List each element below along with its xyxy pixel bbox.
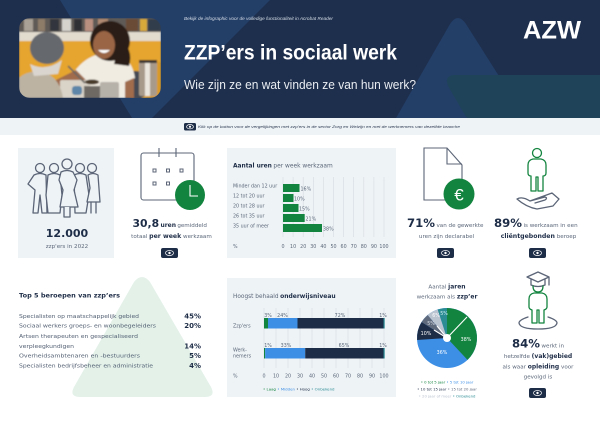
header photo	[19, 18, 161, 99]
stat: 84%	[503, 336, 574, 380]
row labels	[233, 324, 252, 360]
icon: document with euro: €	[454, 186, 464, 204]
pie	[417, 308, 477, 368]
bar values: 1%	[379, 313, 387, 319]
axis labels	[233, 374, 389, 380]
axis labels: 40	[320, 244, 326, 250]
bar values: 38%	[323, 226, 334, 232]
occupation percentages: 20%	[184, 322, 201, 330]
axis labels: 50	[330, 244, 337, 250]
legend: • Laag • Midden • Hoog • Onbekend	[263, 386, 335, 392]
panel: hours bar chart	[227, 148, 396, 258]
axis labels: 100	[379, 374, 389, 380]
bar values: 1%	[379, 343, 387, 349]
axis labels: 30	[297, 374, 303, 380]
bar labels: Minder dan 12 uur	[233, 184, 277, 190]
occupation rows: Specialisten bedrijfsbeheer en administratie	[19, 364, 154, 370]
photo: man	[19, 72, 63, 98]
panel: 12.000 zzp'ers	[18, 148, 114, 258]
chart title: Hoogst behaaldonderwijsniveau	[233, 293, 336, 300]
pie title: Aantal jaren	[428, 284, 466, 290]
stat: 89%: cliëntgebonden beroep	[501, 233, 577, 240]
icon: graduate person	[519, 272, 557, 329]
bar labels: 35 uur of meer	[233, 224, 269, 230]
axis labels: 90	[371, 244, 377, 250]
pie legend: • 10 tot 15 jaar • 15 tot 20 jaar	[417, 386, 477, 392]
row labels: Werk-	[233, 348, 247, 354]
pie title: werkzaam als zzp’er	[417, 294, 477, 300]
bar values: 21%	[306, 216, 317, 222]
stat: 84%: hetzelfde (vak)gebied	[504, 353, 572, 360]
icon: person on hand	[517, 148, 559, 209]
bar: werknemers	[264, 348, 385, 358]
icon: eye button	[529, 248, 546, 258]
stat: 84%: als waar opleiding voor	[503, 364, 574, 370]
bar labels: 20 tot 28 uur	[233, 204, 265, 210]
icon: eye button	[437, 248, 454, 258]
pie legend: • 0 tot 5 jaar • 5 tot 10 jaar	[421, 380, 474, 384]
bar values: 65%	[339, 343, 350, 349]
axis labels: 60	[341, 244, 347, 250]
stat: 12.000: 12.000	[46, 227, 89, 240]
axis labels: %	[233, 374, 238, 380]
occupation rows: Artsen therapeuten en gespecialiseerd	[19, 334, 138, 340]
axis labels: 60	[333, 374, 339, 380]
instruction band	[0, 118, 600, 135]
bar labels: 26 tot 35 uur	[233, 214, 265, 220]
pie: 6%	[432, 313, 440, 319]
axis labels: 0	[281, 244, 285, 250]
bar labels	[233, 184, 277, 230]
axis labels: 100	[379, 244, 389, 250]
icon: eye button	[529, 388, 546, 398]
axis labels: 80	[361, 244, 367, 250]
bars	[283, 184, 322, 232]
stat: 30,8 uren: totaal per week werkzaam	[131, 233, 212, 240]
pie: 10%	[421, 331, 432, 337]
chart title: Aantal uren per week werkzaam	[233, 164, 333, 170]
header banner	[0, 0, 600, 130]
stat: 30,8 uren	[131, 217, 212, 240]
row labels: nemers	[233, 354, 252, 360]
pie legend: • 20 jaar of meer • Onbekend	[419, 394, 476, 398]
stat: 89%: 89% is werkzaam in een	[494, 216, 578, 230]
occupation percentages: 14%	[184, 342, 201, 350]
icon: group of people	[28, 159, 100, 217]
occupation rows: verpleegkundigen	[19, 344, 74, 350]
pie title	[417, 284, 477, 300]
pie: 38%	[461, 337, 472, 343]
axis labels: %	[233, 244, 238, 250]
decorative triangle	[72, 277, 213, 397]
stat: 71%: 71% van de gewerkte	[407, 216, 484, 230]
bar values: 24%	[277, 313, 288, 319]
pie: 5%	[427, 321, 435, 327]
occupation rows: Specialisten op maatschappelijk gebied	[19, 314, 139, 320]
bar values: 72%	[335, 313, 346, 319]
title: ZZP’ers in sociaal werk	[184, 40, 397, 64]
pie: 5%	[440, 311, 448, 317]
stat: 84%: gevolgd is	[524, 374, 552, 380]
stat: 30,8 uren: 30,8urengemiddeld	[132, 217, 207, 230]
bar values	[294, 186, 334, 232]
photo: pot	[60, 80, 90, 98]
axis labels: 80	[357, 374, 363, 380]
axis labels: 20	[300, 244, 306, 250]
axis labels: 70	[351, 244, 357, 250]
bar values	[264, 313, 387, 349]
occupation rows: Sociaal werkers groeps- en woonbegeleiders	[19, 324, 156, 330]
bar: zzp'ers	[264, 318, 385, 328]
bar values: 16%	[300, 186, 312, 192]
subtitle: Wie zijn ze en wat vinden ze van hun werk?	[184, 77, 416, 92]
axis labels	[233, 244, 389, 250]
bar values: 10%	[294, 196, 305, 202]
occupation percentages: 5%	[189, 352, 201, 360]
axis labels: 90	[369, 374, 375, 380]
stat: 84%: 84% werkt in	[512, 336, 565, 350]
photo: woman	[74, 54, 135, 98]
axis labels: 50	[321, 374, 327, 380]
bar values: 3%	[264, 313, 272, 319]
bar values: 1%	[264, 343, 272, 349]
pie: 36%	[437, 350, 448, 356]
panel: education chart	[227, 278, 396, 397]
bar labels: 12 tot 20 uur	[233, 194, 265, 200]
pie legend	[417, 380, 477, 398]
icon: eye button	[161, 248, 178, 258]
instruction text: Klik op de button voor de vergelijkingen met zzp’ers in de sector Zorg en Welzijn en met de werknemers van dezelfde branche	[198, 124, 461, 129]
stat: 71%	[407, 216, 484, 240]
occupation percentages: 4%	[189, 362, 201, 370]
pie chart: years as zzp'er	[417, 284, 477, 398]
photo: urn	[139, 60, 157, 96]
icon: document with euro	[424, 148, 474, 210]
occupation percentages	[184, 312, 201, 370]
occupation rows: Overheidsambtenaren en -bestuurders	[19, 354, 140, 360]
axis labels: 40	[309, 374, 315, 380]
axis labels: 30	[310, 244, 316, 250]
bar values: 33%	[281, 343, 292, 349]
row labels: Zzp'ers	[233, 324, 251, 330]
logo: AZW	[523, 16, 581, 44]
caption: zzp'ers in 2022	[46, 244, 88, 250]
axis labels: 0	[262, 374, 266, 380]
axis labels: 70	[345, 374, 351, 380]
axis labels: 20	[285, 374, 291, 380]
stat: 71%: uren zijn declarabel	[419, 234, 475, 240]
bar values: 15%	[299, 206, 310, 212]
axis labels: 10	[290, 244, 296, 250]
acrobat note: Bekijk de infographic voor de volledige functionaliteit in Acrobat Reader	[184, 16, 334, 21]
occupation percentages: 45%	[184, 312, 201, 320]
axis labels: 10	[273, 374, 279, 380]
heading: Top 5 beroepen van zzp’ers	[19, 292, 120, 300]
occupation rows	[19, 314, 156, 370]
icon: eye button	[184, 123, 196, 130]
stat: 89%	[494, 216, 578, 240]
icon: calendar with clock	[141, 148, 205, 210]
panel: top 5 occupations	[19, 277, 213, 397]
